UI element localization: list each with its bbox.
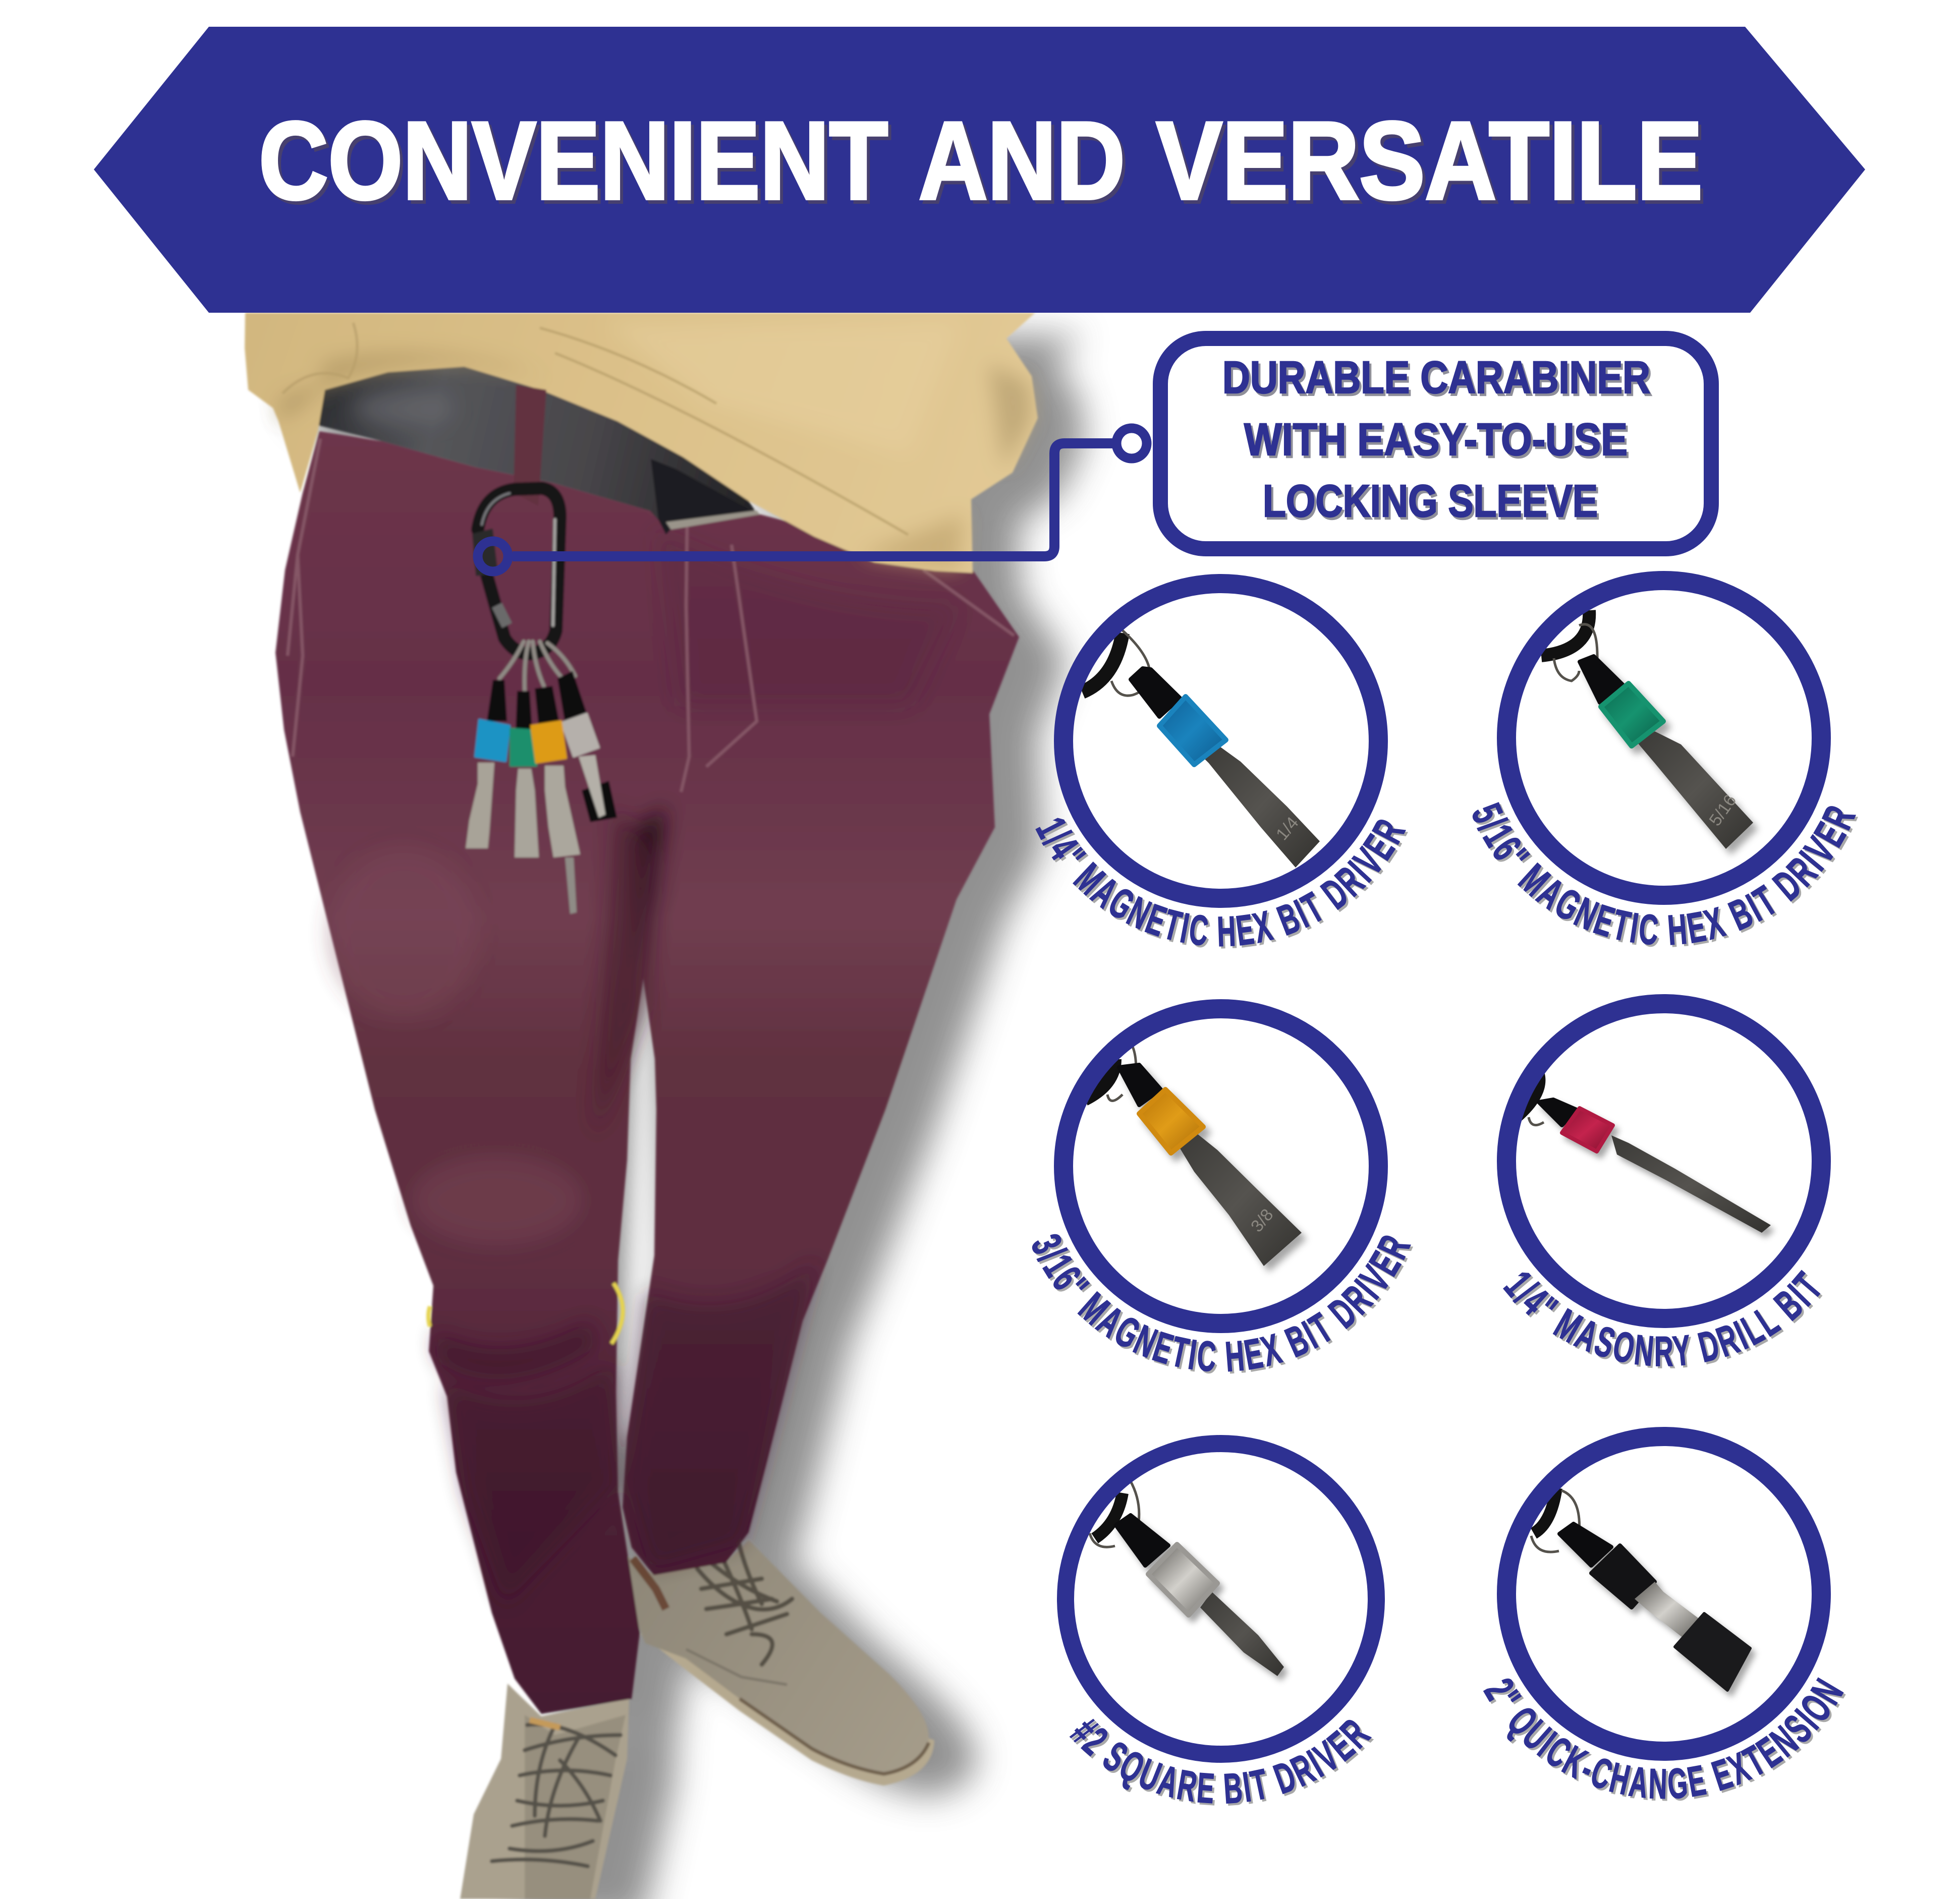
banner: title <box>94 27 1865 313</box>
ring <box>1063 1009 1378 1323</box>
drop shadow of person <box>293 335 1086 1899</box>
bit photo, orange sleeve <box>1085 1047 1302 1266</box>
label: 3/16" MAGNETIC HEX BIT DRIVER <box>1032 1234 1413 1374</box>
bit 2: 5/16 inch magnetic hex bit driver <box>1472 571 1858 947</box>
bit 6: 2 inch quick-change extension <box>1475 1436 1853 1808</box>
title text <box>259 99 1703 222</box>
leather belt <box>318 367 760 535</box>
ring <box>1063 584 1378 898</box>
label: 1/4" MAGNETIC HEX BIT DRIVER <box>1035 818 1408 949</box>
bit cluster on carabiner <box>466 671 617 914</box>
label: 5/16" MAGNETIC HEX BIT DRIVER <box>1472 802 1858 947</box>
photo: person wearing pants with carabiner <box>245 313 1086 1899</box>
bit photo, black sleeve and knurl <box>1531 1488 1750 1690</box>
carabiner <box>473 488 560 654</box>
bit 1: 1/4 inch magnetic hex bit driver <box>1035 574 1408 949</box>
ring <box>1506 1436 1821 1751</box>
callout: durable carabiner: WITH EASY-TO-USE <box>1244 415 1628 465</box>
bit photo, green sleeve <box>1541 610 1753 849</box>
bit 3: 3/16 inch magnetic hex bit driver <box>1032 999 1413 1374</box>
title text: VERSATILE <box>1156 99 1703 222</box>
callout connector to carabiner <box>478 428 1147 571</box>
bit photo, silver sleeve <box>1090 1480 1284 1676</box>
label: 1/4" MASONRY DRILL BIT <box>1503 1270 1822 1368</box>
pants shading folds <box>328 530 959 1604</box>
label: #2 SQUARE BIT DRIVER <box>1062 1708 1380 1812</box>
belt buckle <box>651 459 757 535</box>
bit 4: 1/4 inch masonry drill bit <box>1495 1004 1832 1375</box>
callout: durable carabiner: DURABLE CARABINER <box>1222 353 1650 403</box>
pocket and fly stitching <box>288 439 1014 792</box>
coloured sleeves <box>475 720 510 761</box>
callout: durable carabiner: LOCKING SLEEVE <box>1263 476 1598 527</box>
right boot <box>623 1540 934 1786</box>
black bit necks <box>487 671 588 731</box>
title text: AND <box>919 99 1125 222</box>
callout: durable carabiner <box>1160 338 1711 549</box>
grey shafts <box>466 763 494 848</box>
ring <box>1066 1444 1376 1754</box>
bit photo, blue sleeve <box>1082 630 1320 868</box>
ring <box>1506 581 1821 895</box>
ring <box>1506 1004 1821 1318</box>
bit photo, green sleeve: 5/16 <box>1705 791 1741 830</box>
yellow elastic band <box>428 1283 623 1344</box>
left boot <box>460 1684 629 1899</box>
split rings <box>499 642 575 691</box>
label: 2" QUICK-CHANGE EXTENSION <box>1475 1670 1853 1808</box>
bit 5: #2 square bit driver <box>1062 1444 1380 1812</box>
bit photo, orange sleeve: 3/8 <box>1247 1205 1277 1236</box>
title text: CONVENIENT <box>259 99 888 222</box>
sweater <box>245 313 1038 573</box>
maroon pants <box>275 431 1019 1714</box>
bit photo, red sleeve <box>1514 1074 1771 1233</box>
bit photo, blue sleeve: 1/4 <box>1272 814 1303 844</box>
belt loop <box>514 385 546 506</box>
